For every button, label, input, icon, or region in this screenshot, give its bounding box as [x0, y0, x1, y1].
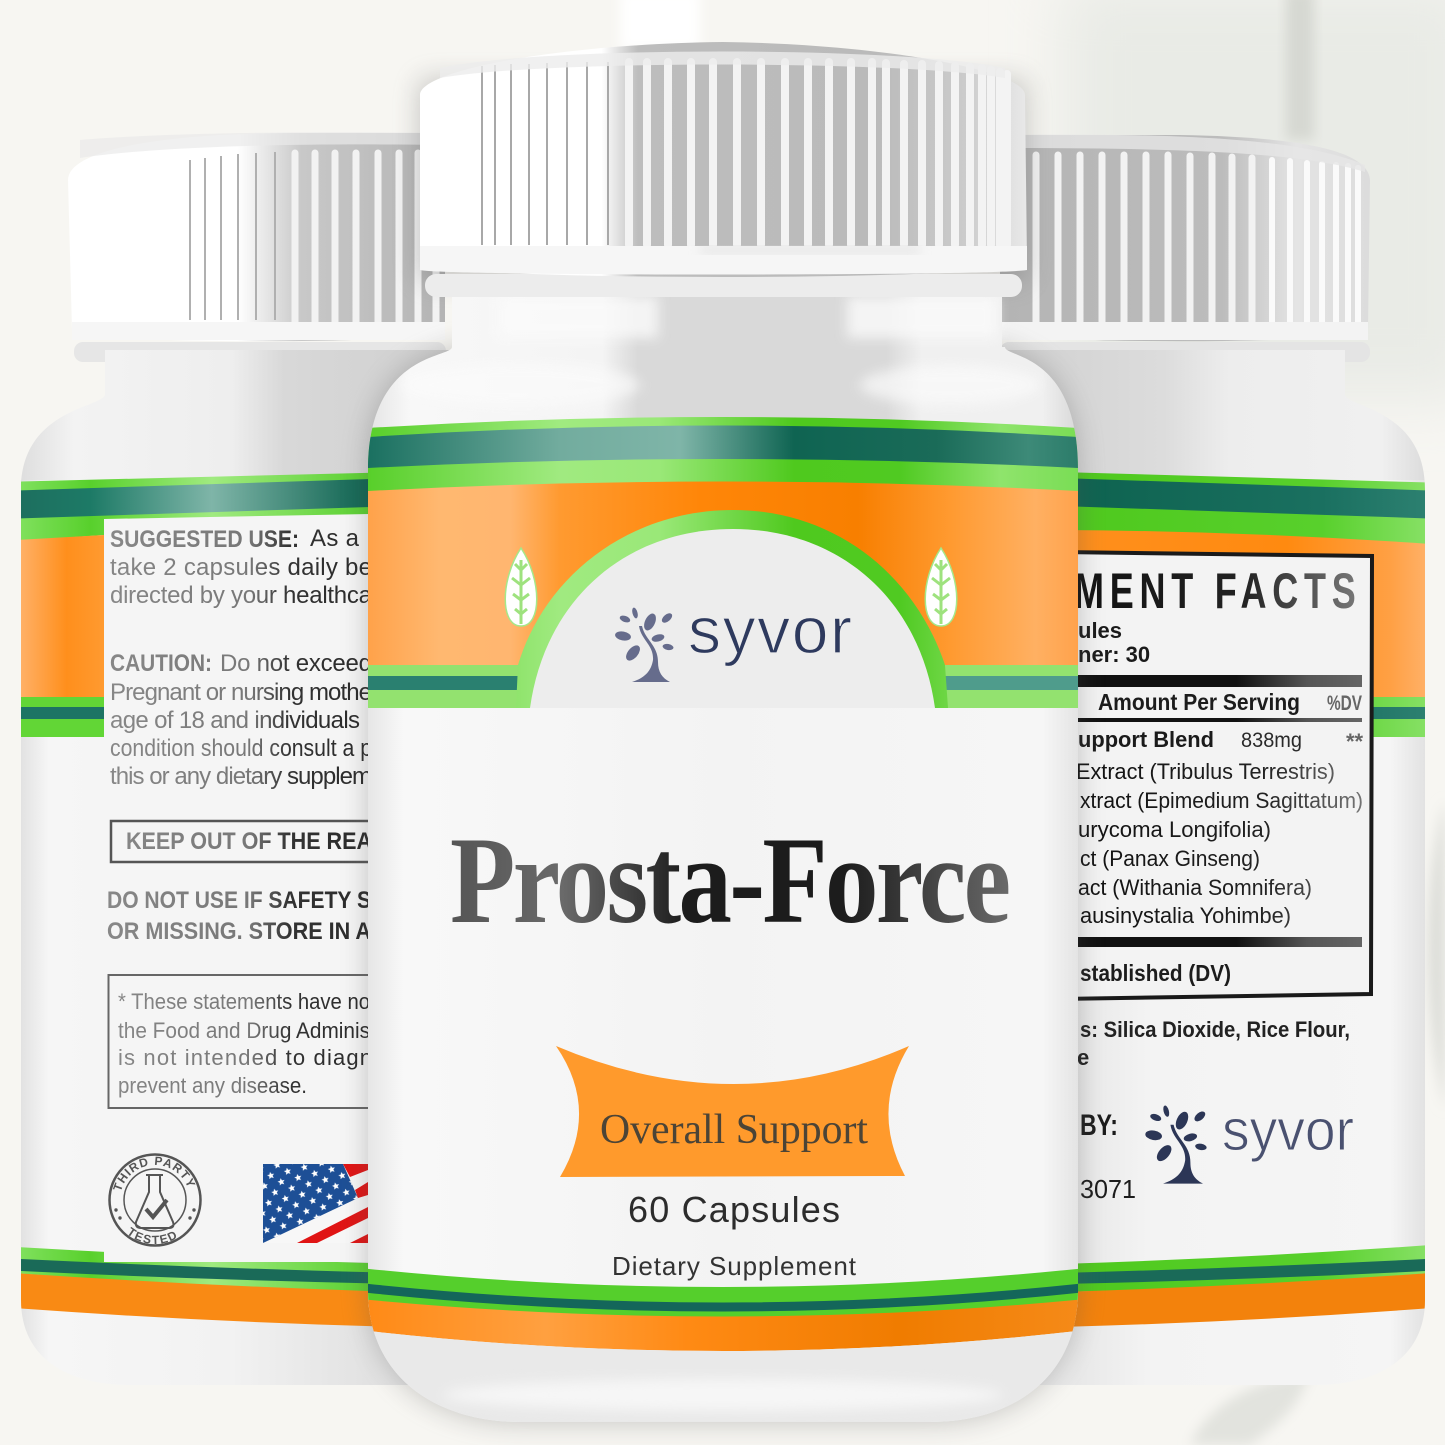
daily value note: stablished (DV) [1080, 960, 1231, 986]
overall support banner [556, 1046, 909, 1177]
orange label field [368, 482, 1078, 668]
heading: ment facts: MENT FACTS [1074, 564, 1361, 619]
ingredient list: urycoma Longifolia) [1078, 817, 1271, 842]
logo: syvor: syvor [688, 593, 852, 667]
dietary supplement text: Dietary Supplement [612, 1251, 857, 1281]
fda disclaimer box: * These statements have no [118, 989, 370, 1014]
icon: right leaf [925, 548, 957, 626]
suggested use text [110, 525, 373, 609]
bottom band [360, 1268, 1086, 1320]
top band [368, 417, 1078, 492]
left bottle (back label) [21, 132, 450, 1385]
icon: american flag [263, 1164, 368, 1243]
right bottle (supplement facts) [980, 135, 1445, 1400]
caution text: condition should consult a p [110, 735, 372, 762]
caution text: this or any dietary supplem [110, 763, 372, 790]
caution text: Pregnant or nursing mothe [110, 679, 372, 706]
keep out of reach box: KEEP OUT OF THE REA [126, 828, 372, 855]
safety seal warning: DO NOT USE IF SAFETY S [107, 887, 371, 914]
suggested use text: take 2 capsules daily be [110, 554, 372, 581]
blend row: 838mg [1241, 729, 1302, 752]
logo: syvor right [1145, 1098, 1354, 1184]
other ingredients: e [1077, 1045, 1089, 1070]
right bottle body [1008, 350, 1425, 1385]
suggested use text: As a [310, 525, 360, 552]
caution text: CAUTION: [110, 650, 212, 677]
ingredient list: ausinystalia Yohimbe) [1080, 903, 1291, 928]
capacity text: 60 Capsules [628, 1189, 840, 1230]
blend row: ** [1346, 729, 1364, 754]
ingredient list: ct (Panax Ginseng) [1080, 846, 1260, 871]
table header: Amount Per Serving [1098, 689, 1300, 715]
fda disclaimer box: prevent any disease. [118, 1073, 307, 1098]
center cap [420, 42, 1027, 277]
suggested use text: directed by your healthca [110, 582, 373, 609]
center bottle [360, 42, 1090, 1430]
rule bars [1060, 675, 1362, 947]
lower green stripe [368, 665, 1078, 708]
center bottle body [360, 340, 1090, 1430]
table header: %DV [1327, 692, 1362, 715]
caution text [110, 650, 372, 790]
fda disclaimer box: the Food and Drug Adminis [118, 1018, 370, 1043]
supplement facts panel [1060, 552, 1372, 999]
fda disclaimer box: is not intended to diagn [118, 1045, 372, 1070]
safety seal warning [107, 887, 371, 945]
suggested use text: SUGGESTED USE: [110, 526, 299, 553]
icon: third party tested badge: TESTED [128, 1226, 176, 1244]
icon: left leaf [505, 548, 537, 626]
other ingredients [1077, 1017, 1350, 1070]
caution text: age of 18 and individuals [110, 707, 360, 734]
center neck [425, 274, 1022, 352]
left bottle body [21, 350, 450, 1385]
logo: syvor right: syvor [1222, 1098, 1354, 1163]
white arch [530, 529, 935, 708]
keep out of reach box [111, 821, 372, 862]
manufactured by: 3071 [1080, 1174, 1136, 1204]
serving info [1078, 618, 1150, 667]
ingredient list: act (Withania Somnifera) [1078, 875, 1312, 900]
left bottle cap [68, 132, 446, 362]
logo: syvor [614, 593, 852, 682]
serving info: ner: 30 [1078, 642, 1150, 667]
other ingredients: s: Silica Dioxide, Rice Flour, [1080, 1017, 1350, 1042]
ingredient list: xtract (Epimedium Sagittatum) [1080, 788, 1363, 813]
icon: third party tested badge: THIRD PARTY [113, 1156, 196, 1190]
ingredient list: Extract (Tribulus Terrestris) [1076, 759, 1335, 784]
serving info: ules [1078, 618, 1122, 643]
safety seal warning: OR MISSING. STORE IN A [107, 918, 371, 945]
left white label panel [104, 514, 370, 1262]
fda disclaimer box [108, 975, 372, 1108]
blend row [1078, 727, 1364, 754]
center bottle shadow [368, 80, 1078, 1422]
ingredient list [1076, 759, 1363, 928]
title: Prosta-Force [450, 813, 1009, 950]
icon: third party tested badge [108, 1153, 202, 1247]
green arch [516, 510, 948, 708]
caution text: Do not exceed [220, 650, 372, 677]
blend row: upport Blend [1078, 727, 1214, 752]
manufactured by: BY: [1080, 1109, 1118, 1142]
manufactured by [1080, 1109, 1136, 1204]
overall support banner: Overall Support [600, 1107, 868, 1153]
right bottle cap [1000, 135, 1370, 362]
